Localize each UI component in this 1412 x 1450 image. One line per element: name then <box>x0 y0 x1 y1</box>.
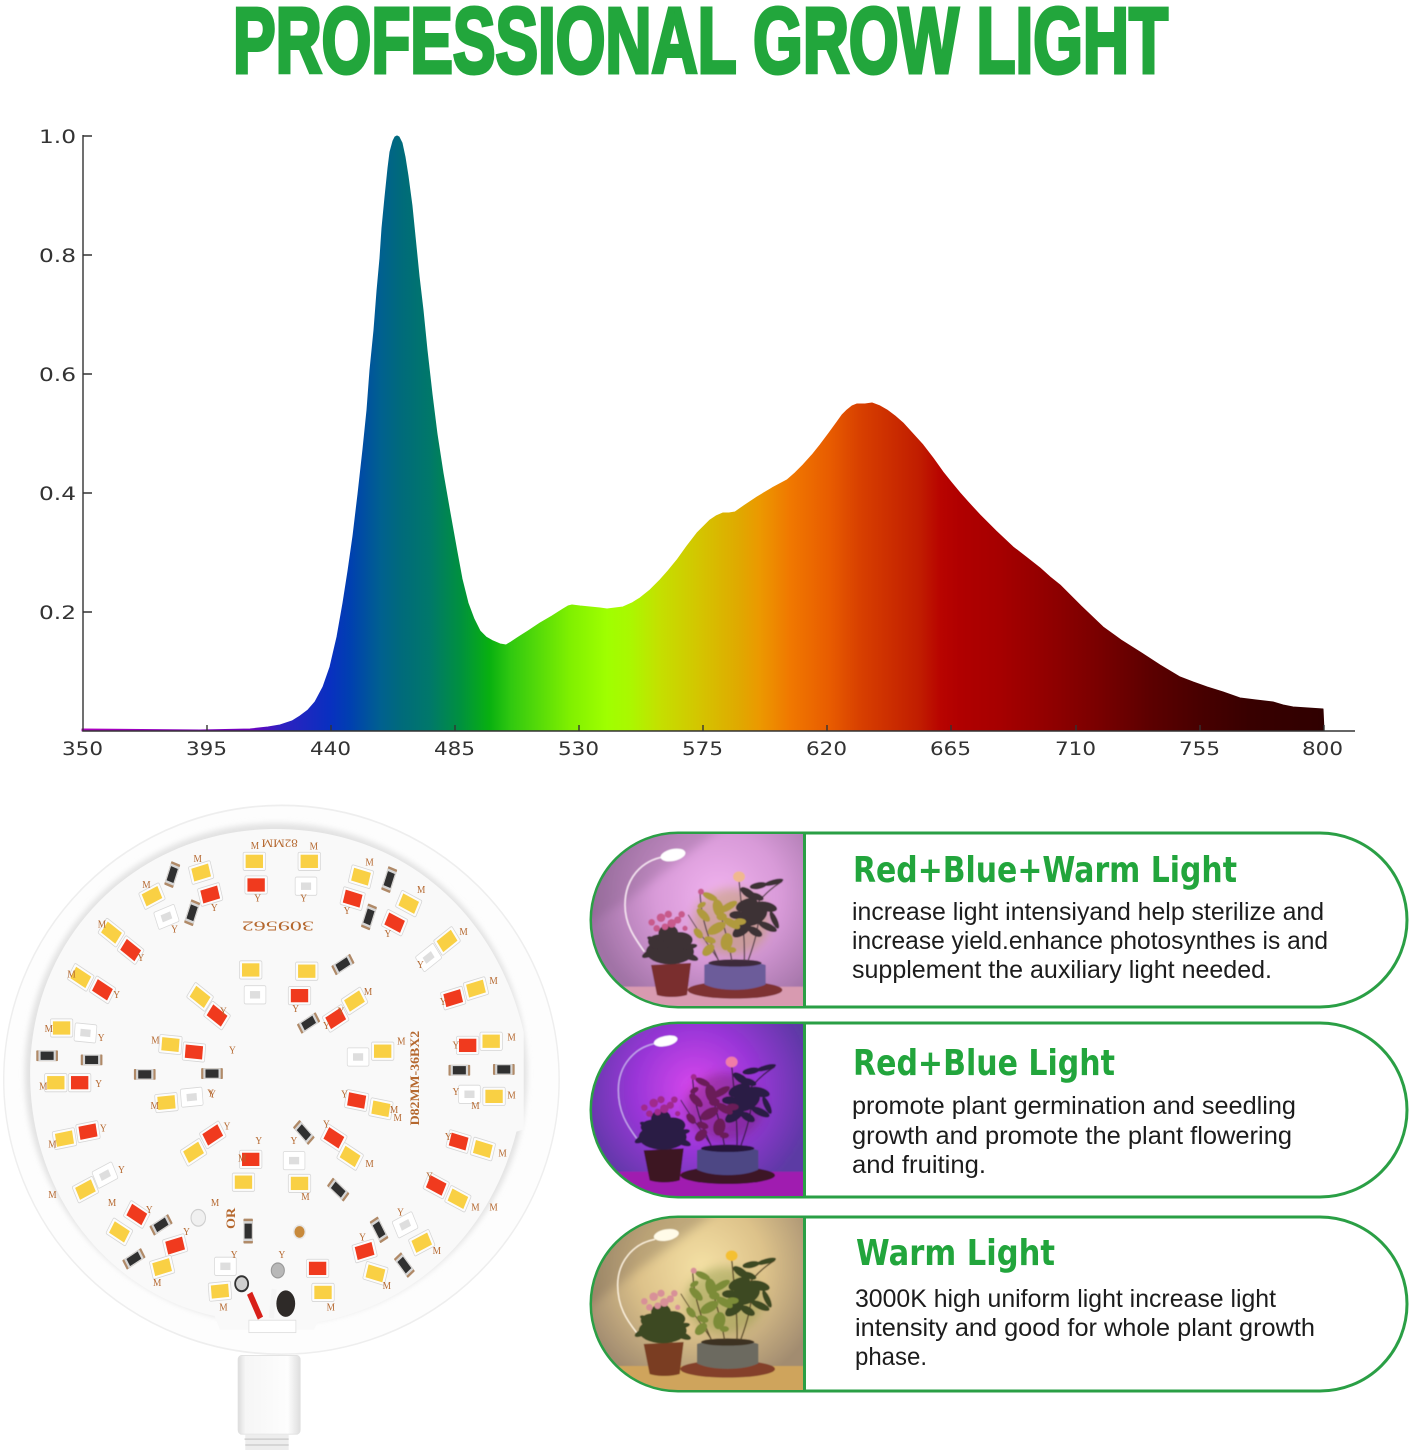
outer housing <box>4 805 559 1354</box>
x axis labels: 395 <box>186 738 227 760</box>
x axis labels: 350 <box>62 738 103 760</box>
x axis labels: 755 <box>1179 738 1220 760</box>
panel outline <box>591 1217 1407 1391</box>
y axis labels: 0.6 <box>39 364 76 386</box>
y axis labels: 1.0 <box>39 126 76 148</box>
photo divider <box>803 833 806 1007</box>
board markings: 82MM <box>261 836 298 849</box>
description: and fruiting. <box>852 1151 986 1179</box>
description <box>852 1092 1296 1179</box>
description: 3000K high uniform light increase light <box>855 1285 1276 1313</box>
x axis labels: 800 <box>1302 738 1343 760</box>
spectrum area curve <box>82 136 1324 731</box>
description: growth and promote the plant flowering <box>852 1122 1292 1150</box>
heading: Warm Light <box>856 1233 1055 1274</box>
photo: plants under red blue warm light <box>592 834 803 1006</box>
heading: Red+Blue+Warm Light <box>853 850 1237 891</box>
axes <box>83 135 1355 731</box>
photo: plants under red blue light <box>592 1024 803 1196</box>
x axis labels: 530 <box>558 738 599 760</box>
x axis labels: 440 <box>310 738 351 760</box>
description: intensity and good for whole plant growth <box>855 1314 1315 1342</box>
y axis labels: 0.4 <box>39 483 76 505</box>
LED lamp head photo <box>4 805 559 1450</box>
panel: warm light <box>585 1210 1407 1397</box>
description: phase. <box>855 1343 927 1371</box>
description: promote plant germination and seedling <box>852 1092 1296 1120</box>
y axis labels: 0.2 <box>39 602 76 624</box>
solder points and wires <box>191 1210 305 1333</box>
x axis labels: 665 <box>930 738 971 760</box>
heading: Red+Blue Light <box>853 1043 1115 1084</box>
x axis labels: 575 <box>682 738 723 760</box>
housing inner shadow <box>25 823 527 1324</box>
y axis labels <box>39 126 76 624</box>
circuit board <box>30 829 524 1333</box>
description: supplement the auxiliary light needed. <box>852 956 1272 984</box>
description <box>855 1285 1315 1371</box>
photo: plants under warm light <box>592 1218 803 1390</box>
lamp stem <box>238 1355 300 1450</box>
board markings: D82MM-36BX2 <box>409 1031 423 1125</box>
board markings: 309562 <box>242 918 314 934</box>
x axis labels: 485 <box>434 738 475 760</box>
x axis labels: 620 <box>806 738 847 760</box>
photo divider <box>803 1217 806 1391</box>
photo divider <box>803 1023 806 1197</box>
panel outline <box>591 1023 1407 1197</box>
panel: red blue light <box>585 1015 1407 1202</box>
board markings: OR <box>224 1207 238 1229</box>
description: increase yield.enhance photosynthes is and <box>852 927 1328 955</box>
board markings: MMMMMMMMMMMMMMMMMMMMMMMMMMMMMMMMMMMM <box>39 840 516 1314</box>
board markings: YYYYYYYYYYYYYYYYYYYYYYYYYYYYYYYYYYYY <box>95 893 460 1261</box>
panel: red blue warm light <box>585 825 1407 1012</box>
x axis labels <box>62 738 1343 760</box>
y axis labels: 0.8 <box>39 245 76 267</box>
description: increase light intensiyand help sterilize and <box>852 898 1324 926</box>
panel outline <box>591 833 1407 1007</box>
spectrum chart <box>39 126 1355 760</box>
x axis labels: 710 <box>1055 738 1096 760</box>
description <box>852 898 1328 984</box>
LEDs <box>36 852 515 1302</box>
